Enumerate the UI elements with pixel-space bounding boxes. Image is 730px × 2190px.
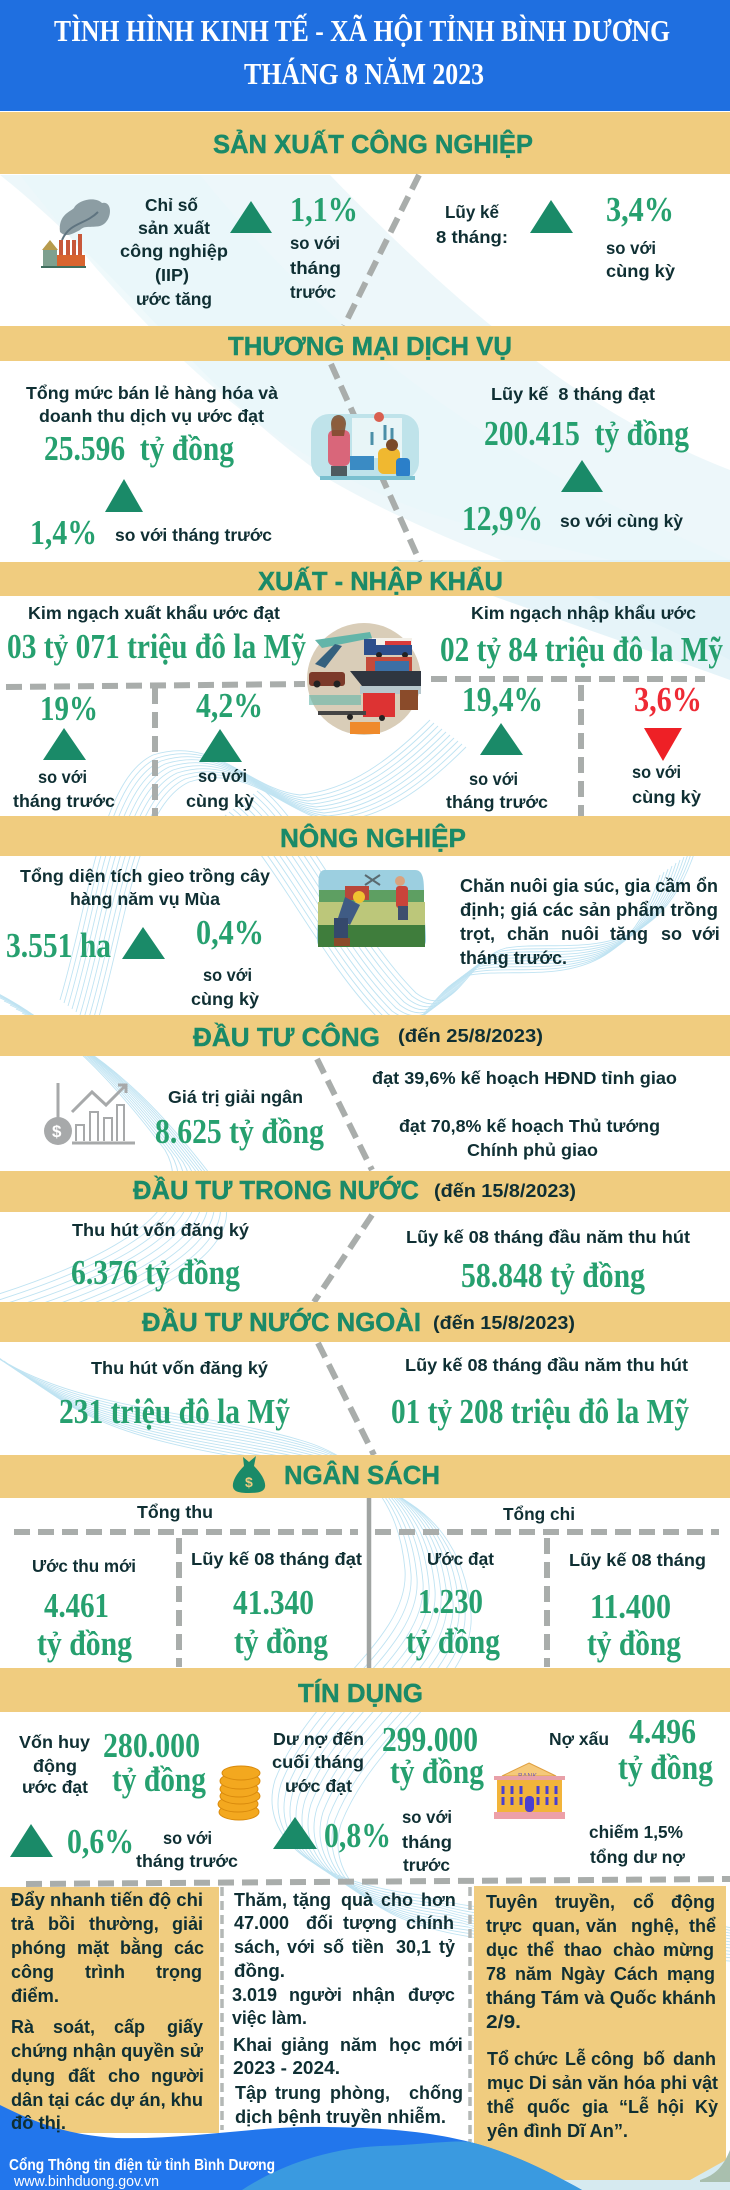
heading: ĐẦU TƯ NƯỚC NGOÀI bbox=[142, 1307, 421, 1337]
text block: middle: đối bbox=[306, 1913, 333, 1933]
text: chiếm 1,5%: chiếm 1,5% bbox=[589, 1822, 683, 1842]
text: chăn nuôi: tháng trước. bbox=[460, 948, 567, 968]
icon: money bag: $ bbox=[245, 1474, 253, 1490]
icon: up triangle bbox=[230, 201, 272, 233]
text block: right: nghệ, bbox=[631, 1916, 679, 1936]
stat: lũy kế 08 tháng: tỷ đồng bbox=[587, 1624, 681, 1663]
text block: middle: người bbox=[289, 1985, 342, 2005]
text block: left: trả bbox=[11, 1914, 35, 1934]
text block: left: trình bbox=[85, 1962, 125, 1982]
stat: ước thu mới: tỷ đồng bbox=[37, 1624, 132, 1663]
value 4.496 tỷ đồng bbox=[618, 1712, 713, 1787]
text: chăn nuôi: trọt, bbox=[460, 924, 495, 944]
text block: left: bồi bbox=[48, 1914, 75, 1934]
source credit bbox=[9, 2157, 275, 2190]
text: nợ xấu: Nợ xấu bbox=[549, 1729, 609, 1749]
text block: right: gia bbox=[582, 2097, 609, 2117]
text block: middle: Khai bbox=[233, 2035, 272, 2055]
text: lũy kế 8 tháng bbox=[436, 202, 508, 247]
title bbox=[54, 12, 670, 91]
text: chỉ số: (IIP) bbox=[155, 265, 189, 285]
text block: middle: 2023 - 2024. bbox=[233, 2058, 340, 2078]
text: chăn nuôi: nuôi bbox=[561, 924, 599, 944]
stat: 4,2%: 4,2% bbox=[196, 686, 263, 725]
panel: nông nghiệp bbox=[0, 816, 730, 1009]
text block: middle: cho bbox=[381, 1890, 413, 1910]
text: so với tháng trước bbox=[402, 1807, 452, 1875]
text block: left: điểm. bbox=[11, 1986, 59, 2006]
icon: up triangle bbox=[10, 1824, 53, 1857]
value 231 triệu đô la Mỹ: 231 triệu đô la Mỹ bbox=[59, 1392, 290, 1431]
icon: up triangle bbox=[530, 200, 573, 233]
stat: lũy kế 08 tháng bbox=[569, 1550, 706, 1663]
text: tổng mức bán lẻ bbox=[26, 383, 278, 426]
stat: lũy kế 08 tháng đạt: tỷ đồng bbox=[234, 1622, 328, 1661]
text block: middle: 30,1 bbox=[396, 1937, 431, 1957]
text block: left: phóng bbox=[11, 1938, 66, 1958]
background swoosh bbox=[0, 175, 730, 680]
text block: right: Cách bbox=[614, 1964, 658, 1984]
icon: coins bbox=[218, 1766, 260, 1820]
text block: right: trực bbox=[486, 1916, 522, 1936]
panel: footer notes bbox=[0, 1886, 730, 2190]
stat: ước thu mới: 4.461 bbox=[44, 1586, 109, 1625]
text block: middle: chính bbox=[406, 1913, 454, 1933]
text block: middle: hơn bbox=[421, 1890, 456, 1910]
text block: right: thể bbox=[689, 1916, 716, 1936]
value 3.551 ha: 3.551 ha bbox=[6, 926, 111, 965]
text block: left: cấp bbox=[114, 2017, 145, 2037]
stat: lũy kế 08 tháng: 11.400 bbox=[590, 1587, 671, 1626]
stat: 3,6% bbox=[632, 680, 702, 807]
value 280.000 tỷ đồng: 280.000 bbox=[103, 1726, 200, 1765]
text block: middle: Thăm, bbox=[234, 1890, 287, 1910]
text: so với tháng trước: tháng bbox=[290, 258, 341, 278]
text: chỉ số: ước tăng bbox=[136, 289, 212, 309]
text block: right: thể bbox=[527, 1940, 554, 1960]
text: chăn nuôi: so bbox=[661, 924, 682, 944]
stat: lũy kế 08 tháng đạt bbox=[191, 1549, 362, 1661]
text block: middle: với bbox=[287, 1937, 315, 1957]
text block: middle: mới bbox=[429, 2035, 463, 2055]
text: thu hút vốn: Thu hút vốn đăng ký bbox=[72, 1220, 249, 1240]
value 299.000 tỷ đồng bbox=[382, 1720, 484, 1791]
text block: left: thường, bbox=[89, 1914, 159, 1934]
text block: middle: tặng bbox=[293, 1890, 331, 1910]
heading: ĐẦU TƯ CÔNG bbox=[193, 1022, 380, 1052]
text block: right: động bbox=[671, 1892, 715, 1912]
text: so với tháng trước: so với tháng trước bbox=[115, 525, 272, 545]
text block: right: dục bbox=[486, 1940, 518, 1960]
text block: right: quan, bbox=[532, 1916, 580, 1936]
text: chăn nuôi: tăng bbox=[610, 924, 648, 944]
text block: right: 2/9. bbox=[486, 2012, 521, 2032]
text block: left: chứng nhận quyền sử bbox=[11, 2041, 204, 2061]
icon: factory bbox=[41, 199, 110, 268]
icon: bank bbox=[494, 1763, 565, 1819]
value 4.496 tỷ đồng: tỷ đồng bbox=[618, 1748, 713, 1787]
text block: right: chức bbox=[514, 2049, 558, 2069]
panel: đầu tư nước ngoài bbox=[0, 1302, 730, 1455]
text: dư nợ bbox=[272, 1729, 364, 1796]
text block: right: Ngày bbox=[561, 1964, 605, 1984]
icon: up triangle bbox=[105, 479, 143, 512]
text block: right bbox=[486, 1892, 718, 2141]
box backgrounds bbox=[0, 1886, 730, 2190]
panel: xuất nhập khẩu bbox=[0, 562, 730, 817]
illustration: logistics bbox=[307, 623, 421, 735]
text: lũy kế: Lũy kế 08 tháng đầu năm thu hút bbox=[406, 1227, 690, 1247]
icon: up triangle bbox=[561, 460, 603, 492]
value 3,4%: 3,4% bbox=[606, 190, 674, 229]
stat: 3,6%: cùng kỳ bbox=[632, 787, 701, 807]
text: chỉ số: sản xuất bbox=[138, 218, 210, 238]
value 4.496 tỷ đồng: 4.496 bbox=[629, 1712, 696, 1751]
heading: TÍN DỤNG bbox=[298, 1679, 423, 1708]
text block: middle: 47.000 bbox=[234, 1913, 289, 1933]
text block: right: cổ bbox=[633, 1892, 654, 1912]
text block: right: 78 bbox=[486, 1964, 506, 1984]
text block: left: các bbox=[174, 1938, 204, 1958]
text: kế hoạch Thủ tướng: đạt 70,8% kế hoạch Thủ tướng bbox=[399, 1116, 660, 1136]
stat: lũy kế 08 tháng đạt: Lũy kế 08 tháng đạt bbox=[191, 1549, 362, 1569]
stat: 4,2% bbox=[186, 686, 263, 811]
divider bbox=[331, 364, 420, 562]
text: tổng mức bán lẻ: Tổng mức bán lẻ hàng hóa và bbox=[26, 383, 278, 403]
text: so với cùng kỳ: so với cùng kỳ bbox=[560, 511, 683, 531]
text: chăn nuôi: chăn bbox=[507, 924, 549, 944]
text: so với cùng kỳ bbox=[606, 238, 675, 281]
icon: money bag bbox=[233, 1456, 265, 1493]
text block: middle: chống bbox=[409, 2083, 463, 2103]
panel: ngân sách bbox=[0, 1455, 730, 1668]
source credit: Cổng Thông tin điện tử tỉnh Bình Dương bbox=[9, 2157, 275, 2174]
text block: middle: nhận bbox=[352, 1985, 395, 2005]
text: so với tháng trước: so với bbox=[402, 1807, 452, 1827]
date note: (đến 25/8/2023) bbox=[398, 1026, 543, 1046]
text block: right: yên đình Dĩ An”. bbox=[487, 2121, 628, 2141]
text: so với cùng kỳ: cùng kỳ bbox=[191, 989, 259, 1009]
date note: (đến 15/8/2023) bbox=[433, 1313, 575, 1333]
text: vốn huy động: Vốn huy bbox=[19, 1732, 90, 1752]
text block: right: chào bbox=[613, 1940, 655, 1960]
text: chiếm 1,5%: tổng dư nợ bbox=[590, 1847, 686, 1867]
text block: left: đô thị. bbox=[11, 2113, 66, 2133]
text block: right: văn bbox=[586, 1916, 617, 1936]
text: chỉ số bbox=[120, 195, 228, 309]
text block: left bbox=[11, 1890, 204, 2133]
text: dư nợ: Dư nợ đến bbox=[273, 1729, 364, 1749]
text block: right: tháng Tám và Quốc khánh bbox=[486, 1988, 716, 2008]
stat: 19,4%: tháng trước bbox=[446, 792, 548, 812]
text block: right: Lễ bbox=[565, 2048, 586, 2069]
text: so với tháng trước: tháng bbox=[402, 1832, 452, 1852]
text block: left: giấy bbox=[167, 2017, 203, 2037]
stat: 19%: tháng trước bbox=[13, 791, 115, 811]
heading: SẢN XUẤT CÔNG NGHIỆP bbox=[213, 129, 533, 159]
text block: middle: sách, bbox=[234, 1937, 280, 1957]
text: chỉ số: công nghiệp bbox=[120, 241, 228, 261]
value 25.596 tỷ đồng: 25.596 tỷ đồng bbox=[44, 429, 234, 468]
text block: right: Tổ bbox=[487, 2049, 509, 2069]
illustration: people with charts bbox=[311, 412, 419, 480]
text block: right: Kỳ bbox=[695, 2097, 718, 2117]
value 8.625 tỷ đồng: 8.625 tỷ đồng bbox=[155, 1112, 324, 1151]
text: so với tháng trước bbox=[136, 1828, 238, 1871]
text: kế hoạch Thủ tướng bbox=[399, 1116, 660, 1160]
value 1,4%: 1,4% bbox=[30, 513, 97, 552]
value 299.000 tỷ đồng: tỷ đồng bbox=[390, 1752, 484, 1791]
text block: right: mừng bbox=[663, 1940, 714, 1960]
value: xuất khẩu: 03 tỷ 071 triệu đô la Mỹ bbox=[7, 627, 306, 666]
text block: middle: giảng bbox=[281, 2035, 329, 2055]
text: tổng diện tích bbox=[20, 866, 270, 909]
text: so với tháng trước: trước bbox=[290, 282, 336, 302]
stat: 19,4% bbox=[446, 680, 548, 812]
text: chăn nuôi: Chăn nuôi gia súc, gia cầm ổn bbox=[460, 876, 718, 896]
text: kế hoạch HĐND: đạt 39,6% kế hoạch HĐND tỉnh giao bbox=[372, 1068, 677, 1088]
divider bbox=[344, 175, 419, 326]
text block: left: mặt bbox=[77, 1938, 109, 1958]
text: vốn huy động bbox=[19, 1732, 90, 1797]
text block: middle: Tập bbox=[235, 2083, 267, 2103]
panel: đầu tư trong nước bbox=[0, 1171, 730, 1302]
icon: bank: BANK bbox=[518, 1773, 537, 1780]
divider bbox=[26, 1879, 730, 1884]
stat: 3,6%: 3,6% bbox=[634, 680, 702, 719]
text: vốn huy động: ước đạt bbox=[22, 1777, 88, 1797]
panel: thương mại dịch vụ bbox=[0, 326, 730, 562]
text: chỉ số: Chỉ số bbox=[145, 195, 198, 215]
text block: right: danh bbox=[673, 2049, 716, 2069]
heading: ĐẦU TƯ TRONG NƯỚC bbox=[133, 1175, 419, 1205]
stat: ước thu mới: Ước thu mới bbox=[32, 1556, 136, 1576]
panel: tín dụng bbox=[0, 1668, 730, 1884]
text: so với cùng kỳ: so với bbox=[606, 238, 656, 258]
text: tổng diện tích: Tổng diện tích gieo trồng cây bbox=[20, 866, 270, 886]
date note: (đến 15/8/2023) bbox=[434, 1181, 576, 1201]
background wave lines bbox=[0, 720, 730, 1974]
stat: 19%: so với bbox=[38, 767, 87, 787]
heading: XUẤT - NHẬP KHẨU bbox=[258, 566, 503, 596]
text: chăn nuôi: định; giá các sản phẩm trồng bbox=[460, 900, 718, 920]
text block: left: giải bbox=[172, 1914, 203, 1934]
value 6.376 tỷ đồng: 6.376 tỷ đồng bbox=[71, 1253, 240, 1292]
text: lũy kế 8 tháng: 8 tháng: bbox=[436, 227, 508, 247]
text block: right: thể bbox=[487, 2097, 514, 2117]
text block: right: hội bbox=[657, 2097, 684, 2117]
value 0,8%: 0,8% bbox=[324, 1816, 391, 1855]
stat: ước thu mới bbox=[32, 1556, 136, 1663]
text block: middle bbox=[232, 1890, 463, 2127]
value 1,1%: 1,1% bbox=[290, 190, 358, 229]
value 0,6%: 0,6% bbox=[67, 1822, 134, 1861]
divider bbox=[317, 1059, 372, 1170]
icon: up triangle bbox=[122, 927, 165, 959]
text: giá trị giải ngân: Giá trị giải ngân bbox=[168, 1087, 303, 1107]
text block: middle: được bbox=[408, 1985, 455, 2005]
text block: middle: dịch bệnh truyền nhiễm. bbox=[235, 2106, 446, 2127]
value 12,9%: 12,9% bbox=[462, 499, 543, 538]
text: so với tháng trước: so với bbox=[290, 233, 340, 253]
stat: lũy kế 08 tháng: Lũy kế 08 tháng bbox=[569, 1550, 706, 1570]
dividers bbox=[6, 679, 705, 817]
text block: right: bố bbox=[643, 2049, 665, 2069]
icon: chart and coin bbox=[44, 1083, 135, 1145]
text block: right: Tuyên bbox=[486, 1892, 538, 1912]
text block: right: thao bbox=[564, 1940, 602, 1960]
panel: sản xuất công nghiệp bbox=[0, 112, 730, 326]
text block: left: dụng bbox=[11, 2066, 55, 2086]
text block: middle: học bbox=[389, 2035, 421, 2055]
heading: THƯƠNG MẠI DỊCH VỤ bbox=[228, 333, 512, 361]
text block: right: mạng bbox=[667, 1964, 715, 1984]
value 58.848 tỷ đồng: 58.848 tỷ đồng bbox=[461, 1256, 645, 1295]
text block: middle: phòng, bbox=[330, 2083, 390, 2103]
icon: up triangle bbox=[273, 1817, 317, 1849]
text block: right: quốc bbox=[527, 2097, 570, 2117]
text: tổng thu: Tổng thu bbox=[137, 1502, 213, 1522]
text block: left: công bbox=[11, 1962, 54, 1982]
header bbox=[0, 0, 730, 111]
stat: ước đạt: 1.230 bbox=[418, 1582, 483, 1621]
divider bbox=[318, 1343, 374, 1455]
text: thu hút vốn: Thu hút vốn đăng ký bbox=[91, 1358, 268, 1378]
source credit: www.binhduong.gov.vn bbox=[13, 2174, 159, 2190]
text block: middle: 3.019 bbox=[232, 1985, 277, 2005]
heading: NÔNG NGHIỆP bbox=[280, 823, 466, 853]
title: THÁNG 8 NĂM 2023 bbox=[244, 56, 484, 91]
text block: left: soát, bbox=[53, 2017, 95, 2037]
heading: NGÂN SÁCH bbox=[284, 1460, 440, 1490]
icon: chart and coin: $ bbox=[52, 1122, 62, 1141]
text block: middle: năm bbox=[340, 2035, 377, 2055]
text block: middle: số bbox=[323, 1937, 344, 1957]
text block: right: truyền, bbox=[555, 1892, 615, 1912]
text block: middle: đồng. bbox=[234, 1961, 285, 1981]
panel: đầu tư công bbox=[0, 1015, 730, 1170]
stat: 19,4%: so với bbox=[469, 769, 518, 789]
text: chăn nuôi bbox=[460, 876, 720, 968]
text block: left: cho bbox=[108, 2066, 140, 2086]
value 0,4%: 0,4% bbox=[196, 913, 264, 952]
text: chiếm 1,5% bbox=[589, 1822, 686, 1867]
stat: 4,2%: cùng kỳ bbox=[186, 791, 254, 811]
illustration: farmers bbox=[317, 870, 426, 947]
text block: right: “Lễ bbox=[619, 2096, 649, 2117]
stat: 4,2%: so với bbox=[198, 766, 247, 786]
text block: right: mục Di sản văn hóa phi vật bbox=[487, 2073, 718, 2093]
text: tổng chi: Tổng chi bbox=[503, 1504, 575, 1524]
text block: left: đất bbox=[68, 2066, 95, 2086]
value 280.000 tỷ đồng bbox=[103, 1726, 206, 1799]
text block: middle: quà bbox=[341, 1890, 374, 1910]
value 200.415 tỷ đồng: 200.415 tỷ đồng bbox=[484, 414, 689, 453]
text: kim ngạch nhập khẩu: Kim ngạch nhập khẩu ước bbox=[471, 603, 696, 623]
text block: left: dân tại các dự án, khu bbox=[11, 2090, 203, 2110]
footer wave bbox=[0, 2105, 582, 2190]
stat: ước đạt: Ước đạt bbox=[427, 1549, 494, 1569]
text block: left: trọng bbox=[156, 1962, 202, 1982]
value 280.000 tỷ đồng: tỷ đồng bbox=[112, 1760, 206, 1799]
text block: right: công bbox=[591, 2049, 634, 2069]
text block: left: người bbox=[151, 2066, 204, 2086]
text: kim ngạch xuất khẩu: Kim ngạch xuất khẩu ước đạt bbox=[28, 603, 280, 623]
text block: left: bằng bbox=[120, 1937, 163, 1958]
dividers bbox=[14, 1498, 719, 1668]
text block: right: năm bbox=[515, 1964, 552, 1984]
text: lũy kế 8 tháng đạt: Lũy kế 8 tháng đạt bbox=[491, 384, 655, 404]
divider bbox=[314, 1215, 372, 1302]
text: chăn nuôi: với bbox=[692, 924, 720, 944]
text: vốn huy động: động bbox=[33, 1756, 77, 1776]
value 299.000 tỷ đồng: 299.000 bbox=[382, 1720, 478, 1759]
text block: left: Đẩy nhanh tiến độ chi bbox=[11, 1890, 203, 1910]
stat: lũy kế 08 tháng đạt: 41.340 bbox=[233, 1583, 314, 1622]
text block: middle: tỷ bbox=[439, 1937, 455, 1957]
stat: ước đạt bbox=[406, 1549, 500, 1661]
text block: middle: việc làm. bbox=[232, 2008, 307, 2028]
text: kế hoạch Thủ tướng: Chính phủ giao bbox=[467, 1140, 598, 1160]
text: so với cùng kỳ: cùng kỳ bbox=[606, 261, 675, 281]
text: so với tháng trước: tháng trước bbox=[136, 1851, 238, 1871]
text: so với cùng kỳ: so với bbox=[203, 965, 252, 985]
text: lũy kế 8 tháng: Lũy kế bbox=[445, 202, 499, 222]
stat: 3,6%: so với bbox=[632, 762, 681, 782]
stat: ước đạt: tỷ đồng bbox=[406, 1622, 500, 1661]
text: so với cùng kỳ bbox=[191, 965, 259, 1009]
text: so với tháng trước bbox=[290, 233, 341, 302]
text: dư nợ: cuối tháng bbox=[272, 1752, 364, 1772]
text: so với tháng trước: trước bbox=[403, 1855, 450, 1875]
text: so với tháng trước: so với bbox=[163, 1828, 212, 1848]
text block: middle: tượng bbox=[343, 1913, 397, 1933]
stat: 19,4%: 19,4% bbox=[462, 680, 543, 719]
text block: middle: tiền bbox=[352, 1937, 384, 1957]
text block: middle: trung bbox=[275, 2083, 321, 2103]
text: tổng mức bán lẻ: doanh thu dịch vụ ước đạt bbox=[39, 406, 264, 426]
stat: 19% bbox=[13, 689, 115, 811]
text block: left: Rà bbox=[11, 2017, 35, 2037]
text: lũy kế: Lũy kế 08 tháng đầu năm thu hút bbox=[405, 1355, 688, 1375]
text: tổng diện tích: hàng năm vụ Mùa bbox=[70, 889, 220, 909]
stat: 19%: 19% bbox=[40, 689, 98, 728]
text: dư nợ: ước đạt bbox=[285, 1776, 352, 1796]
